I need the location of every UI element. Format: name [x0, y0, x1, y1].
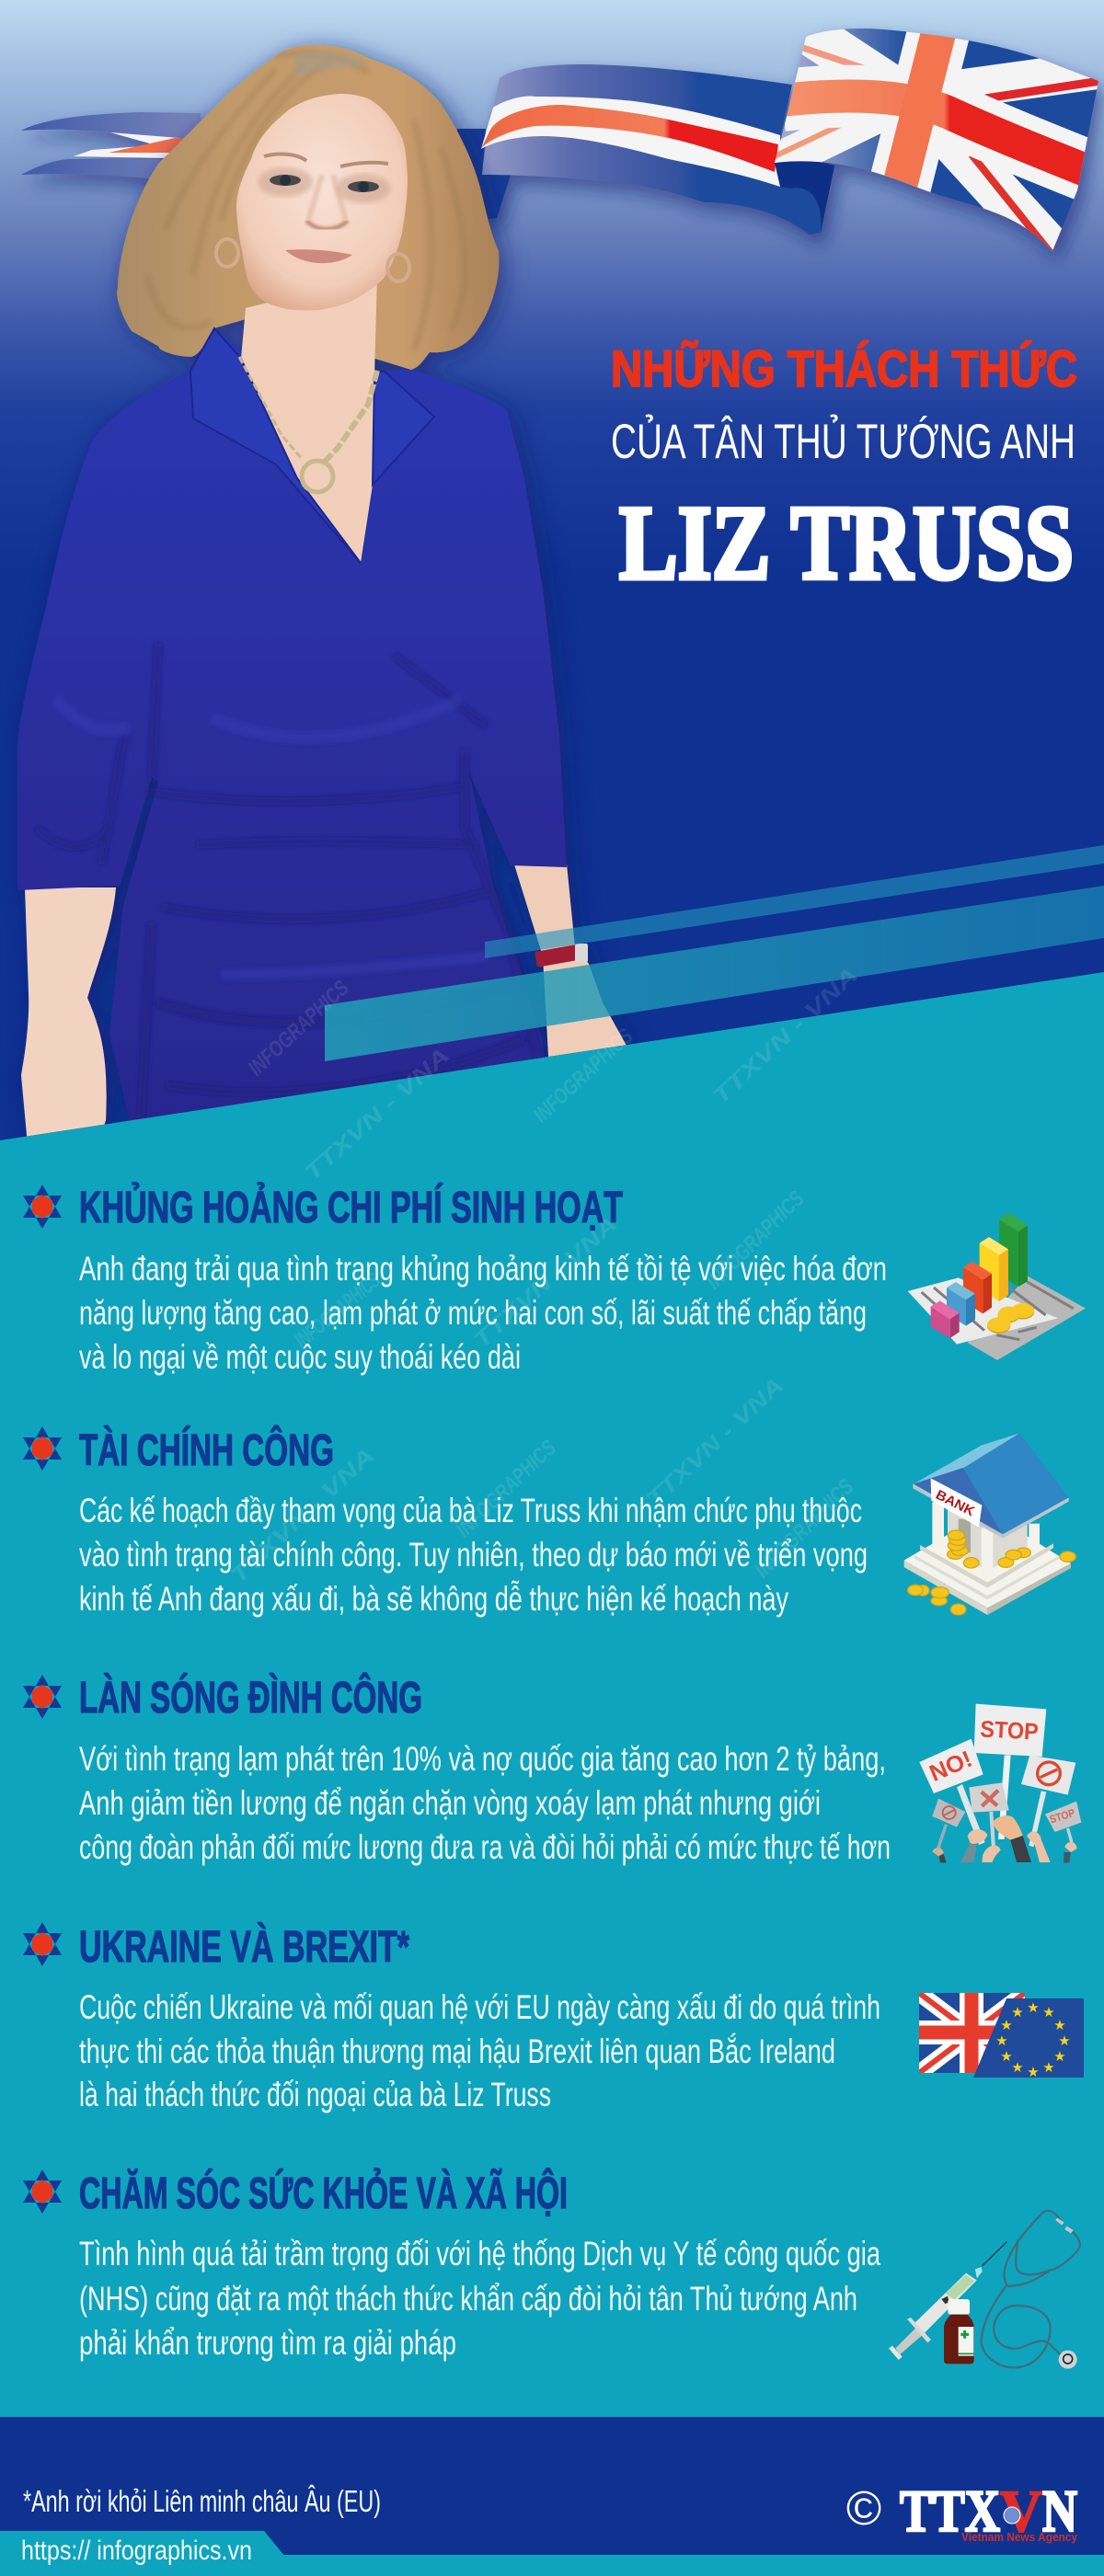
section 1 [23, 1182, 1086, 1376]
icon: UK flag and EU flag: ★ [1053, 2048, 1066, 2065]
ribbon tails left [21, 112, 202, 179]
heading: LÀN SÓNG ĐÌNH CÔNG [79, 1672, 422, 1723]
dress [17, 328, 567, 1168]
watermarks: INFOGRAPHICS [451, 1436, 561, 1542]
icon: UK flag and EU flag: ★ [1027, 2064, 1040, 2080]
face [236, 94, 408, 311]
icon: bar chart on papers [908, 1213, 1086, 1360]
body text: là hai thách thức đối ngoại của bà Liz Truss [79, 2076, 551, 2113]
hair [117, 45, 500, 370]
heading: CHĂM SÓC SỨC KHỎE VÀ XÃ HỘI [79, 2168, 568, 2218]
neck and chest [241, 276, 377, 563]
body text [79, 1740, 891, 1866]
watermarks: TTXVN - VNA [708, 963, 863, 1109]
body text: Anh giảm tiền lương để ngăn chặn vòng xoáy lạm phát nhưng giới [79, 1784, 821, 1822]
watermarks: INFOGRAPHICS [529, 1024, 638, 1128]
union jack flag [764, 18, 1104, 267]
icon: UK flag and EU flag: ★ [1000, 2048, 1013, 2065]
footnote: *Anh rời khỏi Liên minh châu Âu (EU) [23, 2484, 381, 2518]
flag ribbon [21, 18, 1104, 267]
body text [79, 1250, 887, 1376]
icon: UK flag and EU flag: ★ [1000, 2017, 1013, 2033]
watermarks: TTXVN - VNA [642, 1373, 788, 1512]
body text [79, 2235, 880, 2362]
watermarks: INFOGRAPHICS [244, 976, 354, 1081]
body text: phải khẩn trương tìm ra giải pháp [79, 2324, 456, 2362]
logo: copyright TTXVN: N [1042, 2479, 1077, 2545]
website url: https:// infographics.vn [21, 2536, 252, 2566]
icon: UK flag and EU flag: ★ [1027, 1999, 1040, 2016]
watch [535, 943, 588, 967]
collar lapels [190, 328, 434, 563]
watermarks: INFOGRAPHICS [291, 1268, 385, 1354]
logo: copyright TTXVN: V [1000, 2479, 1042, 2545]
photo: Liz Truss [17, 45, 627, 1168]
icon: UK flag and EU flag: ★ [995, 2032, 1008, 2049]
watermarks: INFOGRAPHICS [750, 1474, 858, 1583]
logo: copyright TTXVN [846, 2479, 1078, 2545]
body text: và lo ngại về một cuộc suy thoái kéo dài [79, 1338, 521, 1376]
icon: bank: BANK [933, 1488, 977, 1520]
icon: protest signs: STOP [1048, 1806, 1076, 1826]
watermarks: TTXVN - VNA [226, 1443, 380, 1588]
background: blue gradient header [0, 0, 1104, 1196]
footer url tab [0, 2531, 285, 2557]
logo: copyright TTXVN: © [846, 2482, 881, 2536]
watermarks: INFOGRAPHICS [701, 1186, 810, 1294]
watermarks: TTXVN - VNA [300, 1043, 454, 1185]
icon: UK flag and EU flag: ★ [1011, 2059, 1024, 2076]
ribbon middle band [481, 64, 834, 235]
icon: star bullet [23, 1185, 62, 1229]
heading: UKRAINE VÀ BREXIT* [79, 1922, 409, 1972]
section 5 [23, 2168, 1080, 2369]
icon: UK flag and EU flag: ★ [1053, 2017, 1066, 2033]
icon: UK flag and EU flag: ★ [1042, 2004, 1055, 2021]
icon: syringe, bottle and stethoscope [889, 2211, 1080, 2369]
earrings [216, 239, 409, 281]
body text [79, 1492, 868, 1618]
icon: star bullet [23, 2170, 62, 2214]
heading: TÀI CHÍNH CÔNG [79, 1425, 334, 1475]
icon: UK flag and EU flag: ★ [1058, 2032, 1071, 2049]
body text: thực thi các thỏa thuận thương mại hậu Brexit liên quan Bắc Ireland [79, 2032, 835, 2070]
icon: protest signs: NO! [926, 1746, 976, 1787]
ribbon dark fold behind head [457, 129, 511, 221]
icon: UK flag and EU flag: ★ [1011, 2004, 1024, 2021]
icon: protest signs: STOP [980, 1716, 1039, 1746]
logo: copyright TTXVN: Vietnam News Agency [961, 2530, 1078, 2544]
icon: UK flag and EU flag [919, 1993, 1084, 2080]
right arm and hand [514, 864, 627, 1071]
watermarks [226, 963, 863, 1588]
necklace [239, 357, 377, 492]
icon: UK flag and EU flag: ★ [1042, 2059, 1055, 2076]
watermarks: TTXVN - VNA [469, 1212, 623, 1353]
diagonal decorative stripes [325, 845, 1104, 1061]
icon: protest signs [919, 1704, 1081, 1862]
panel: teal content background [0, 972, 1104, 2576]
body text [79, 1988, 880, 2113]
body text: kinh tế Anh đang xấu đi, bà sẽ không dễ thực hiện kế hoạch này [79, 1580, 788, 1618]
heading: KHỦNG HOẢNG CHI PHÍ SINH HOẠT [79, 1182, 623, 1232]
icon: star bullet [23, 1922, 62, 1966]
icon: bank [904, 1433, 1075, 1615]
icon: star bullet [23, 1426, 62, 1471]
panel: footer band [0, 2417, 1104, 2555]
icon: star bullet [23, 1675, 62, 1719]
left arm and hand [21, 887, 116, 1145]
logo: copyright TTXVN: TTX [900, 2479, 1000, 2545]
section 2 [23, 1425, 1075, 1618]
section 3 [23, 1672, 1081, 1866]
section 4 [23, 1922, 1084, 2113]
